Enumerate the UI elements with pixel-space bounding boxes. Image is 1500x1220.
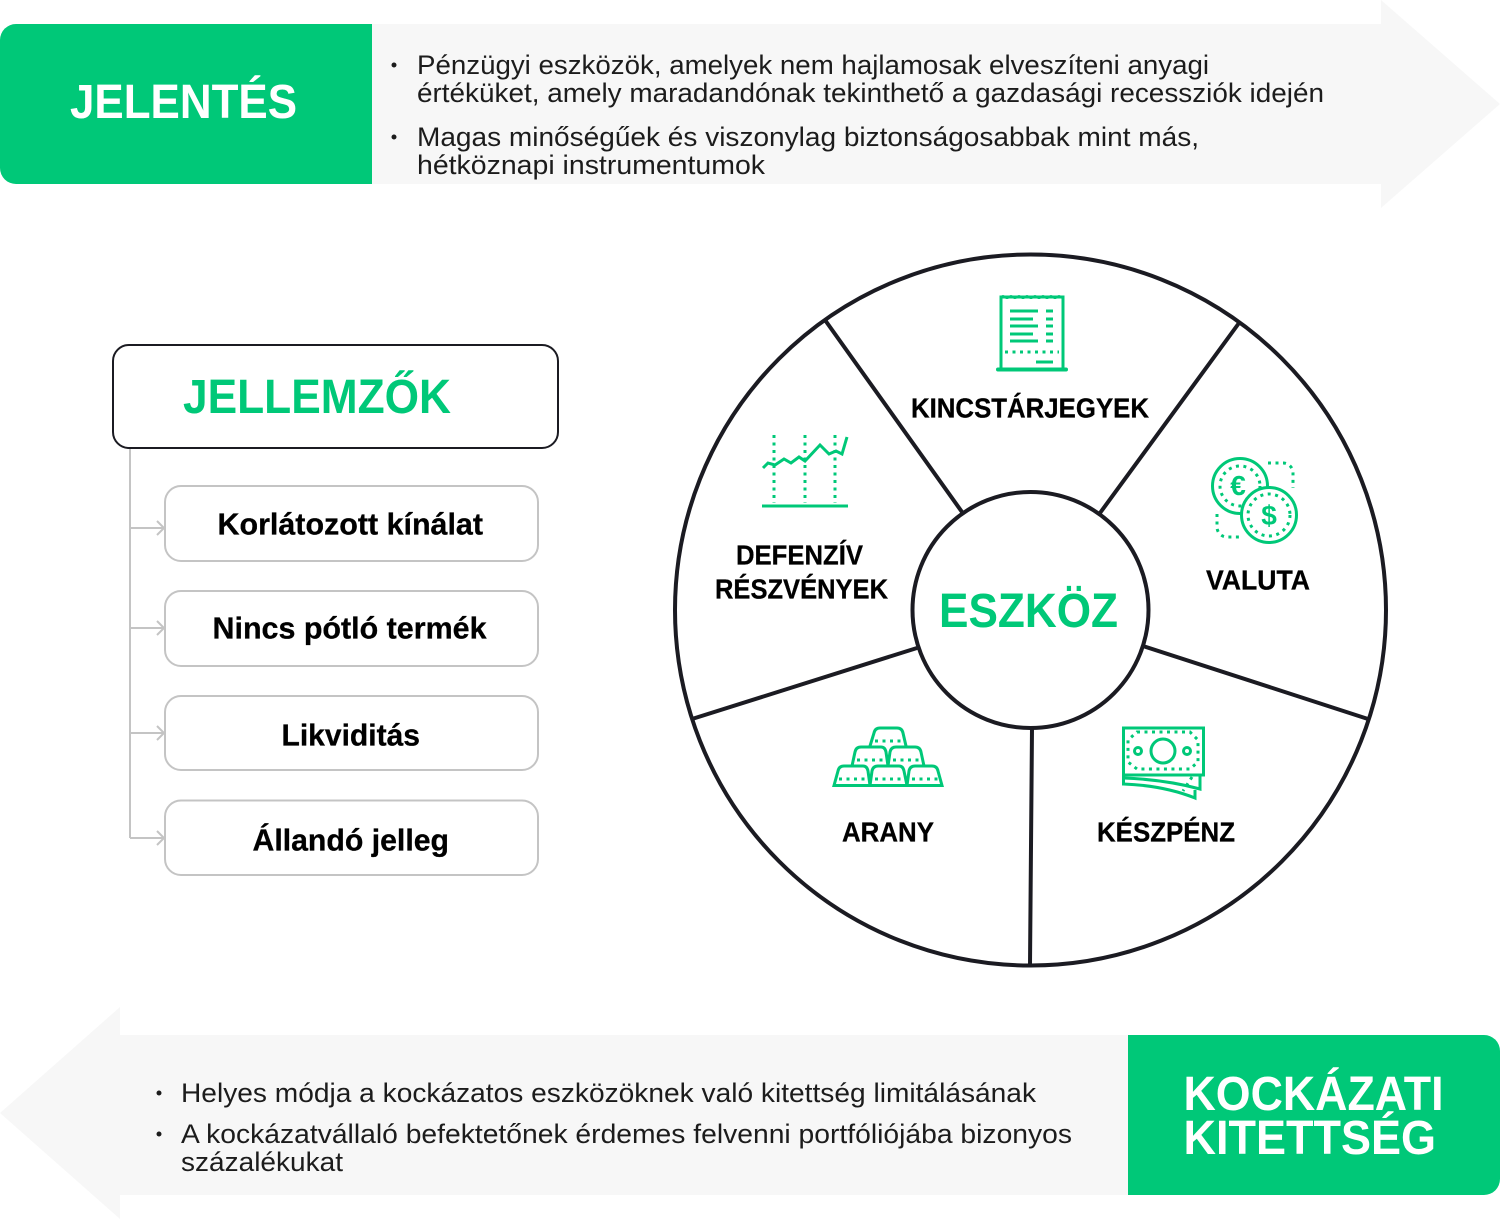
hub label: ESZKÖZ — [939, 585, 1118, 638]
icon: defensive stock chart — [762, 435, 848, 506]
icon: currency coins — [1212, 458, 1296, 542]
heading box: jelentés — [0, 24, 372, 184]
heading: jelentés: JELENTÉS — [70, 75, 297, 129]
item: korlátozott kínálat: Korlátozott kínálat — [218, 506, 483, 542]
wheel hub — [912, 492, 1148, 728]
label: arany: ARANY — [842, 816, 934, 848]
label: defenzív részvények: DEFENZÍV — [736, 540, 863, 570]
item: állandó jelleg: Állandó jelleg — [252, 822, 449, 858]
text block: exposure: Helyes módja a kockázatos eszközöknek való kitettség limitálásának — [181, 1078, 1037, 1108]
label: készpénz: KÉSZPÉNZ — [1097, 816, 1235, 848]
text block: exposure: százalékukat — [181, 1147, 344, 1177]
text block: definition: hétköznapi instrumentumok — [417, 150, 766, 180]
item: likviditás — [165, 696, 538, 770]
text block: definition: értéküket, amely maradandónak tekinthető a gazdasági recessziók idején — [417, 78, 1324, 108]
item: likviditás: Likviditás — [282, 718, 420, 752]
icon: currency coins: € — [1230, 470, 1246, 501]
label: kincstárjegyek: KINCSTÁRJEGYEK — [911, 392, 1149, 424]
label: defenzív részvények: RÉSZVÉNYEK — [715, 574, 888, 604]
icon: banknotes — [1124, 728, 1204, 798]
item: korlátozott kínálat — [165, 486, 538, 561]
panel: kockázati kitettség — [0, 1007, 1500, 1219]
heading: kockázati kitettség — [1184, 1067, 1444, 1165]
text block: definition: Magas minőségűek és viszonylag biztonságosabbak mint más, — [417, 122, 1199, 152]
text block: exposure: A kockázatvállaló befektetőnek érdemes felvenni portfóliójába bizonyos — [181, 1119, 1072, 1149]
text block: definition: Pénzügyi eszközök, amelyek nem hajlamosak elveszíteni anyagi — [417, 50, 1209, 80]
heading: kockázati kitettség: KITETTSÉG — [1184, 1111, 1436, 1165]
heading: jellemzők: JELLEMZŐK — [183, 370, 451, 424]
chart: asset wheel — [675, 254, 1386, 966]
wheel segments — [675, 254, 1386, 966]
text block: definition — [392, 50, 1324, 180]
icon: treasury bill — [998, 296, 1066, 370]
panel: jellemzők — [113, 345, 558, 875]
item: állandó jelleg — [165, 800, 538, 875]
arrow: top background — [372, 0, 1500, 208]
heading box: kockázati kitettség — [1128, 1035, 1500, 1195]
icon: currency coins: $ — [1261, 500, 1277, 531]
label: valuta: VALUTA — [1206, 564, 1310, 596]
panel: jelentés — [0, 0, 1500, 208]
connector tree — [130, 448, 164, 845]
icon: gold bars — [834, 728, 942, 786]
item: nincs pótló termék: Nincs pótló termék — [212, 610, 487, 646]
arrow: bottom background — [0, 1007, 1128, 1219]
label: defenzív részvények — [715, 540, 888, 604]
heading box: jellemzők — [113, 345, 558, 448]
text block: exposure — [156, 1078, 1072, 1177]
item: nincs pótló termék — [165, 591, 538, 666]
heading: kockázati kitettség: KOCKÁZATI — [1184, 1067, 1444, 1121]
